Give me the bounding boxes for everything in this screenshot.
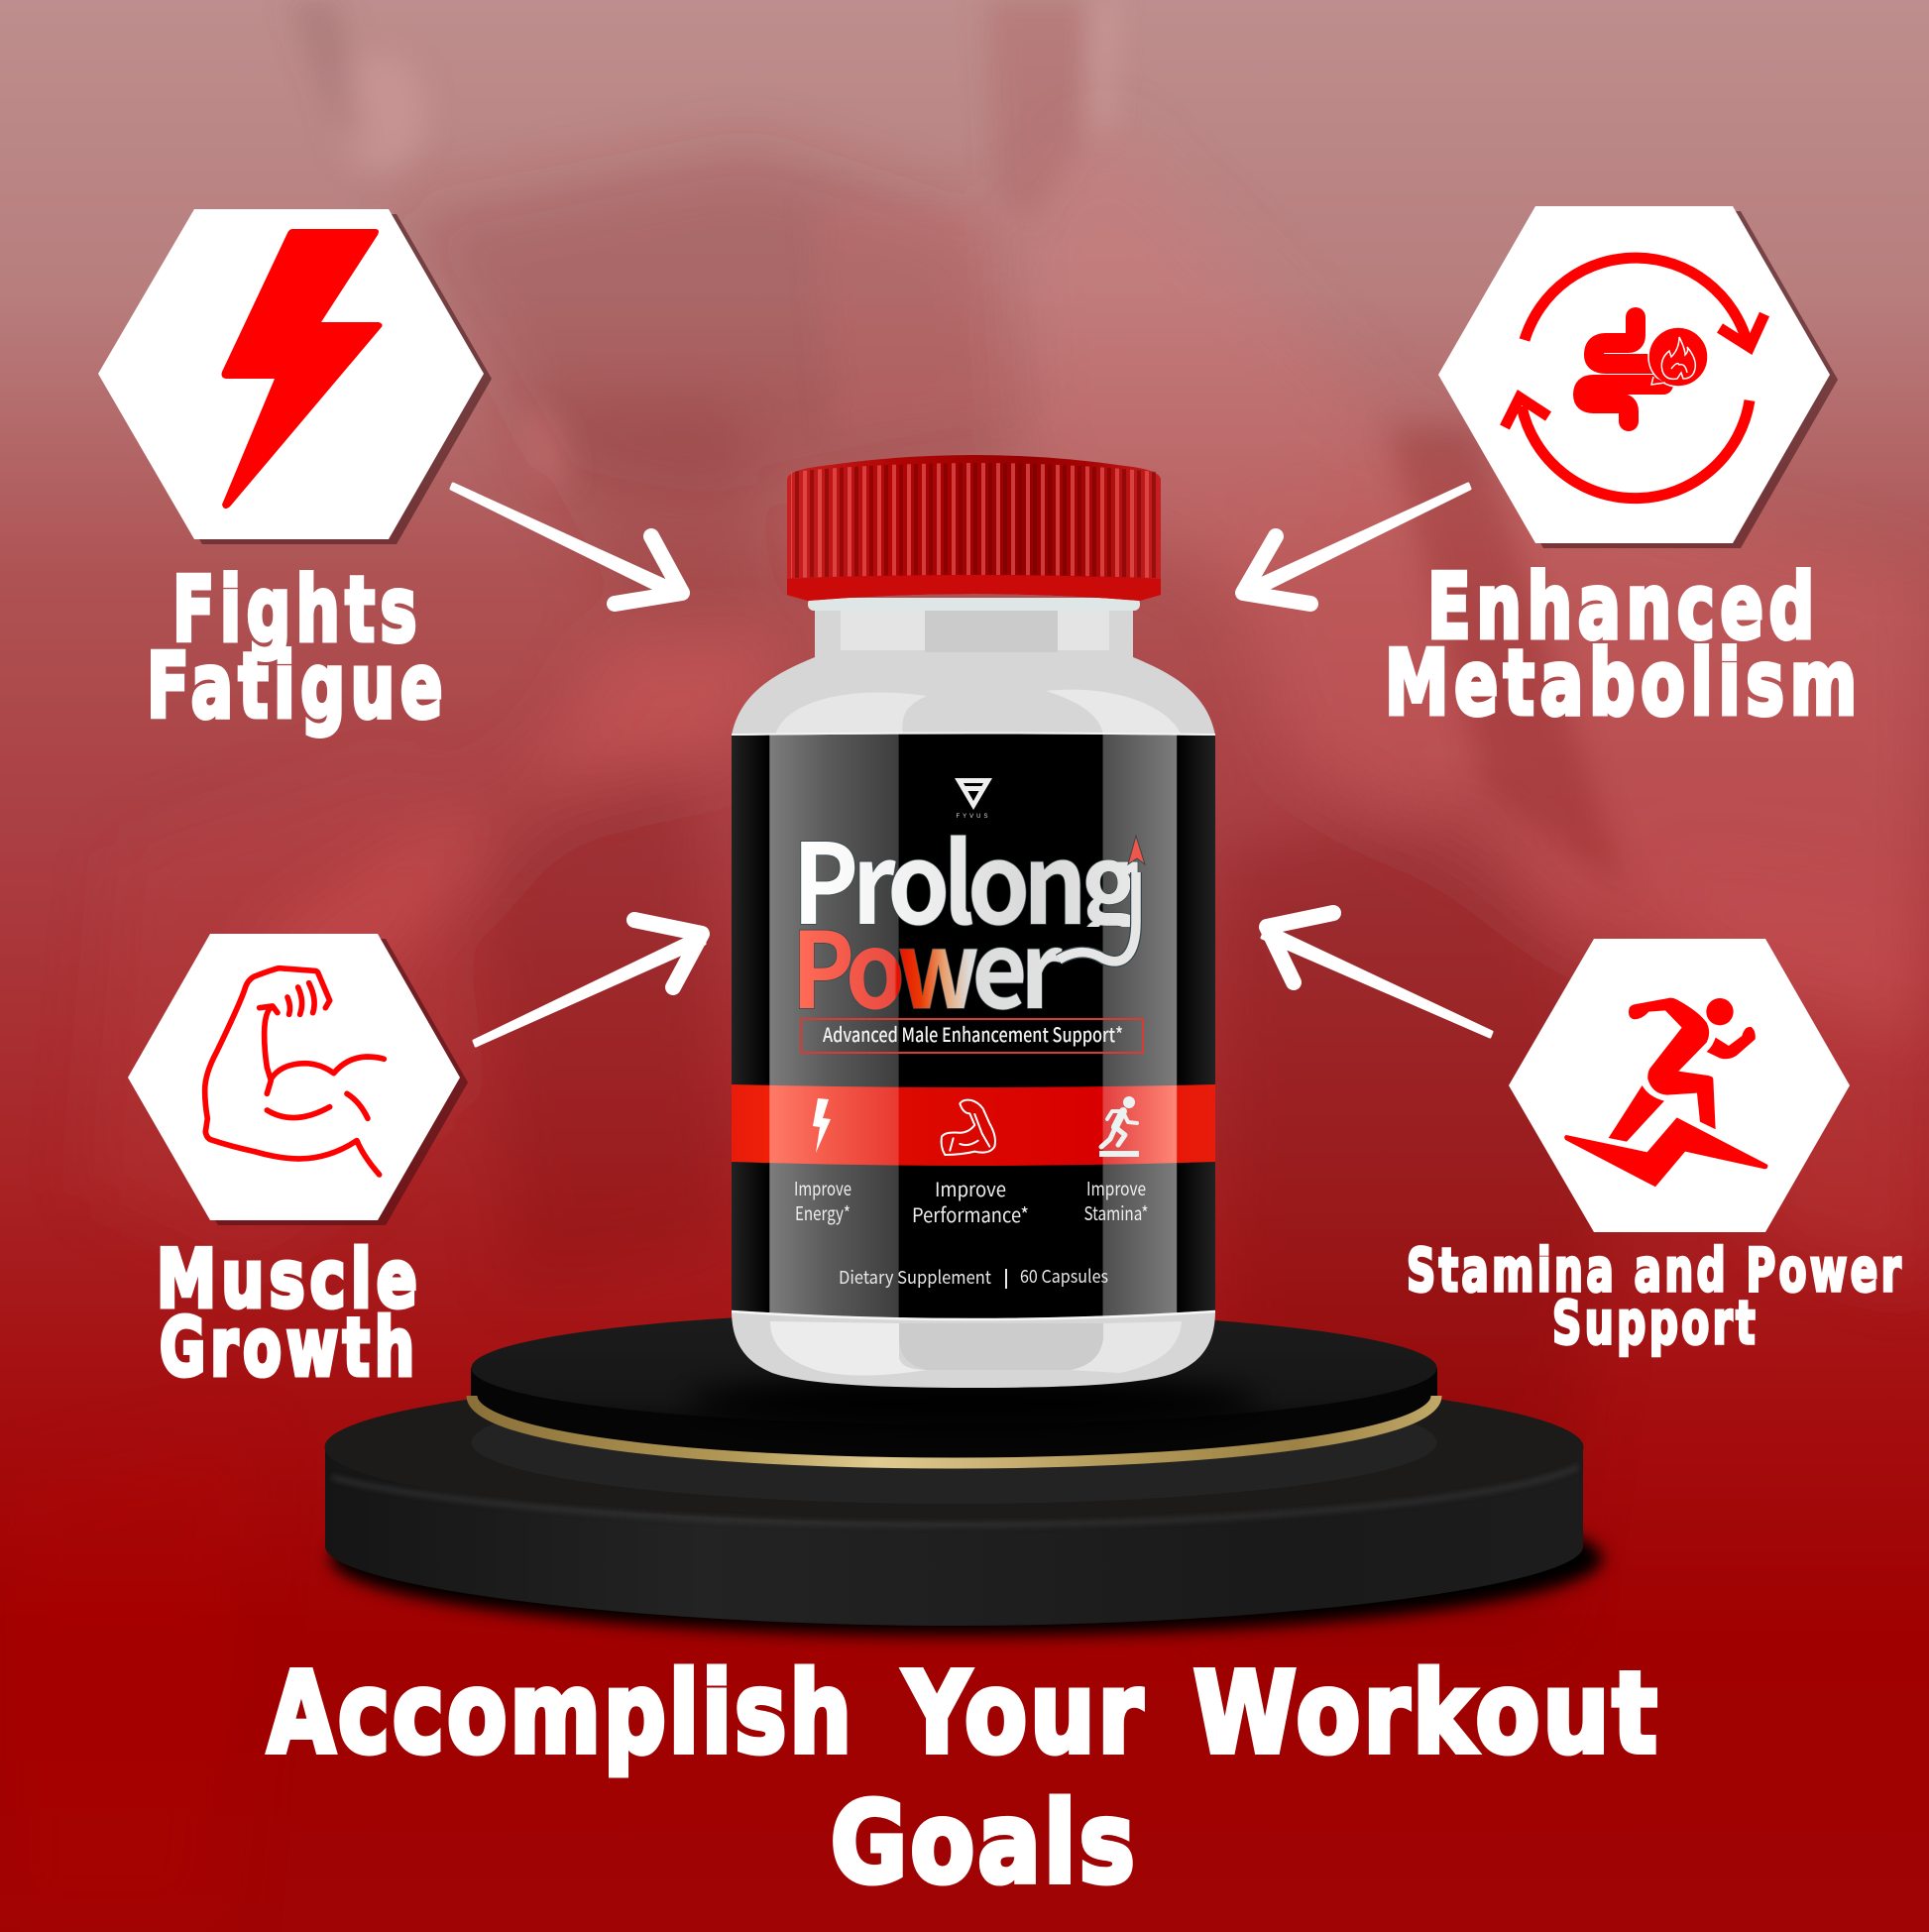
brand logo: FYVUS — [956, 814, 991, 820]
label: fights fatigue: Fatigue — [147, 634, 448, 739]
panel: enhanced metabolism — [1243, 206, 1863, 736]
hexagon badge: runner — [1509, 939, 1850, 1232]
supplement line: Dietary Supplement — [839, 1264, 991, 1290]
benefit captions: Improve — [1086, 1175, 1146, 1201]
benefit captions: Stamina* — [1084, 1199, 1148, 1226]
icon: small bolt — [813, 1098, 831, 1153]
base highlights — [770, 1321, 927, 1376]
icon: small runner — [1099, 1096, 1139, 1157]
product bottle — [732, 455, 1215, 1388]
arrow: to bottle — [1262, 913, 1492, 1037]
benefit captions: Improve — [935, 1174, 1006, 1202]
panel: fights fatigue — [98, 209, 682, 739]
label: stamina and power support: Support — [1552, 1289, 1759, 1358]
icon: small arm — [942, 1100, 995, 1155]
neck highlights — [775, 598, 1182, 736]
product name — [799, 835, 1146, 1011]
supplement line — [839, 1263, 1108, 1290]
label: fights fatigue: Fights — [172, 558, 422, 662]
bottle body — [732, 601, 1215, 1388]
label: muscle growth: Growth — [160, 1302, 419, 1394]
benefit captions: Performance* — [912, 1199, 1029, 1228]
title — [268, 1649, 1660, 1908]
title: Goals — [831, 1779, 1138, 1908]
lower tier — [325, 1372, 1584, 1626]
benefit captions: Energy* — [795, 1199, 851, 1226]
benefit captions — [794, 1174, 1148, 1228]
icon: intestine with flame — [1583, 317, 1708, 421]
title: Workout — [1193, 1649, 1660, 1778]
title: Accomplish — [268, 1649, 854, 1778]
supplement line: 60 Capsules — [1020, 1263, 1108, 1289]
label: muscle growth — [157, 1233, 422, 1394]
swoosh arrow — [1059, 836, 1145, 962]
black label — [732, 734, 1215, 1318]
icon: flexed arm — [205, 968, 384, 1175]
title: Your — [902, 1649, 1146, 1778]
product name: Power — [791, 886, 1063, 1039]
icon: lightning bolt — [222, 229, 383, 509]
panel: muscle growth — [128, 920, 705, 1394]
cap — [787, 455, 1161, 601]
icon: runner — [1564, 998, 1767, 1187]
podium — [325, 1311, 1603, 1636]
product name: Prolong — [792, 796, 1139, 957]
hexagon badge: metabolism — [1438, 206, 1838, 548]
panel: stamina and power support — [1262, 913, 1904, 1358]
red benefit band — [732, 1084, 1215, 1166]
gold ring — [472, 1396, 1436, 1463]
hexagon badge: bolt — [98, 209, 492, 544]
arrow: to bottle — [451, 484, 682, 604]
label: stamina and power support — [1407, 1236, 1904, 1358]
arrow: to bottle — [1243, 484, 1470, 604]
hexagon badge: muscle — [128, 934, 468, 1225]
label: muscle growth: Muscle — [157, 1233, 422, 1325]
arrow: to bottle — [474, 920, 705, 1046]
benefit captions: Improve — [794, 1175, 851, 1201]
tagline box: Advanced Male Enhancement Support* — [823, 1019, 1123, 1048]
label: fights fatigue — [147, 558, 448, 739]
upper tier — [471, 1311, 1437, 1504]
label: enhanced metabolism — [1385, 555, 1863, 736]
brand logo — [955, 778, 992, 820]
icon: cycle arrows — [1505, 258, 1764, 499]
